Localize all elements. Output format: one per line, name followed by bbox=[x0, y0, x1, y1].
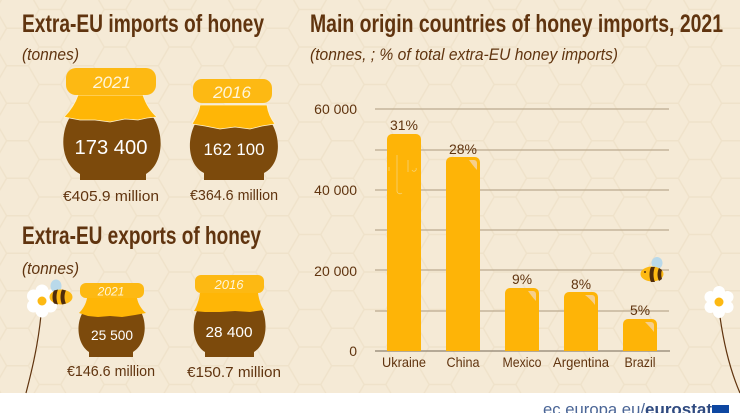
value: exports 2021: €146.6 million bbox=[67, 363, 155, 380]
value: imports 2021: €405.9 million bbox=[63, 188, 159, 205]
jar: imports 2016 bbox=[190, 79, 278, 180]
axis labels bbox=[314, 101, 357, 359]
bar: China: China bbox=[446, 354, 480, 370]
jar: imports 2016: 162 100 bbox=[204, 140, 264, 159]
bar: Ukraine: Ukraine bbox=[382, 354, 426, 370]
flower: right bbox=[704, 286, 740, 393]
heading: exports: Extra-EU exports of honey bbox=[22, 222, 261, 250]
axis labels: 60 000 bbox=[314, 101, 357, 117]
bar: Brazil: 5% bbox=[630, 302, 650, 318]
heading: imports: Extra-EU imports of honey bbox=[22, 10, 264, 38]
bar: Argentina: 8% bbox=[571, 276, 591, 292]
bar: Ukraine: 31% bbox=[390, 117, 418, 133]
bar: Brazil: Brazil bbox=[624, 354, 656, 370]
bar: Argentina: Argentina bbox=[553, 354, 609, 370]
jar: exports 2016: 28 400 bbox=[206, 324, 252, 341]
value: imports 2016: €364.6 million bbox=[190, 187, 278, 204]
bar: China bbox=[446, 141, 480, 370]
bar: Mexico: 9% bbox=[512, 271, 532, 287]
jar: imports 2021: 173 400 bbox=[74, 137, 148, 159]
bar chart bbox=[314, 101, 670, 370]
bar: Mexico: Mexico bbox=[502, 354, 542, 370]
icon: bee right bbox=[640, 257, 664, 282]
flower: left bbox=[26, 284, 57, 393]
jar: exports 2021: 25 500 bbox=[91, 327, 133, 343]
jar: exports 2021: 2021 bbox=[97, 284, 124, 298]
bar: Ukraine bbox=[382, 117, 426, 370]
bar: Mexico bbox=[502, 271, 542, 370]
unit: origin countries: (tonnes, ; % of total extra-EU honey imports) bbox=[310, 45, 618, 64]
bar: Argentina bbox=[553, 276, 609, 370]
axis labels: 0 bbox=[349, 343, 357, 359]
jar: exports 2021 bbox=[78, 283, 146, 357]
jar: imports 2016: 2016 bbox=[212, 83, 251, 102]
jar: imports 2021 bbox=[63, 68, 161, 180]
jar: imports 2021: 2021 bbox=[92, 73, 131, 92]
bar: China: 28% bbox=[449, 141, 477, 157]
icon: bee left bbox=[50, 280, 72, 304]
footer: source bbox=[543, 401, 729, 413]
axis labels: 40 000 bbox=[314, 182, 357, 198]
bar: Brazil bbox=[623, 302, 657, 370]
unit: imports: (tonnes) bbox=[22, 45, 79, 64]
jar: exports 2016: 2016 bbox=[214, 277, 244, 292]
axis labels: 20 000 bbox=[314, 263, 357, 279]
jar: exports 2016 bbox=[194, 275, 266, 357]
value: exports 2016: €150.7 million bbox=[187, 364, 281, 381]
unit: exports: (tonnes) bbox=[22, 259, 79, 278]
